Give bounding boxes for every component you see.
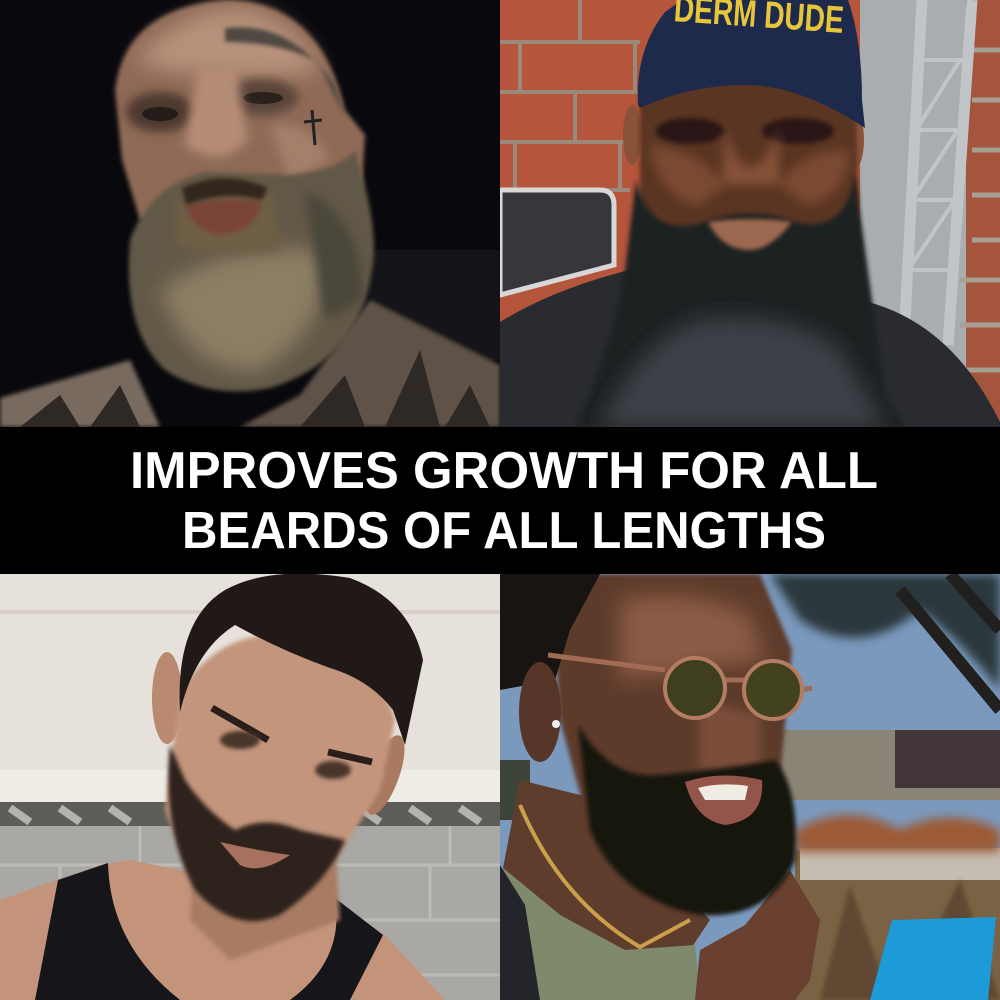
metal truss [905, 0, 972, 345]
round sunglasses [548, 655, 812, 719]
photo: man in navy Derm Dude cap with long dark beard [500, 0, 1000, 427]
photo: man in round sunglasses outdoors with full dark beard [500, 574, 1000, 1000]
photo: man with dark hair, short beard and black tank top [0, 574, 500, 1000]
headline line 2: BEARDS OF ALL LENGTHS [182, 502, 826, 560]
headline band [0, 427, 1000, 574]
brick wall mortar [500, 0, 640, 190]
photo: tattooed man with long grey-blond beard [0, 0, 500, 427]
neck and chest [503, 780, 710, 950]
headline line 1: IMPROVES GROWTH FOR ALL [130, 442, 878, 500]
head [556, 574, 796, 797]
